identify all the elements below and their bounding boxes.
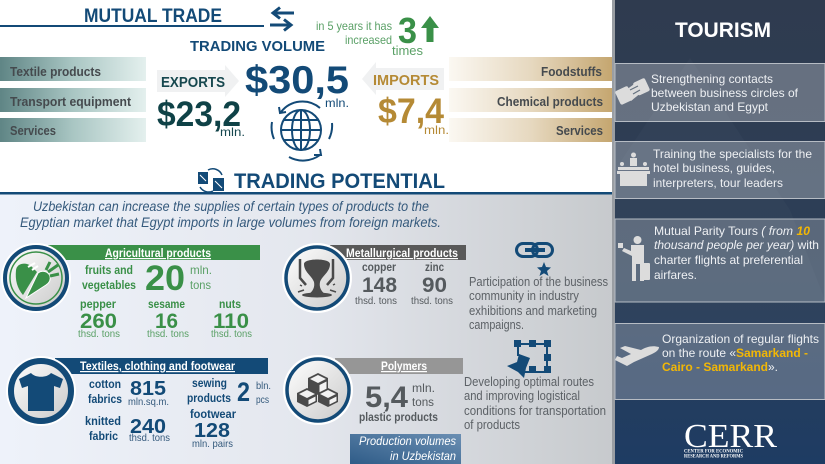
- exports arrow and value: $23,2: [157, 95, 241, 134]
- tourism item: regular flights: [615, 324, 825, 400]
- growth callout: times: [392, 44, 423, 58]
- tourism item: training: hotel business, guides,: [653, 161, 775, 175]
- intro text: [20, 198, 441, 230]
- panel: export products: [0, 57, 146, 142]
- heading: trading potential: TRADING POTENTIAL: [234, 170, 445, 193]
- growth callout: in 5 years it has: [316, 19, 392, 33]
- icon: handshake: [615, 78, 650, 105]
- icon: cubes: [283, 355, 353, 425]
- heading: trading volume: TRADING VOLUME: [190, 38, 325, 55]
- stat: fruits and vegetables: vegetables: [82, 278, 136, 292]
- icon: trading potential exchange: [198, 169, 224, 192]
- stat: pepper: thsd. tons: [78, 328, 120, 340]
- stat: sewing products: products: [187, 391, 231, 405]
- intro text: Uzbekistan can increase the supplies of certain types of products to the: [33, 198, 429, 214]
- tourism item: business contacts: [615, 64, 825, 122]
- stat: fruits and vegetables: 20: [145, 259, 185, 298]
- stat: zinc: zinc: [425, 260, 444, 274]
- stat: sesame: thsd. tons: [147, 328, 189, 340]
- stat: footwear: mln. pairs: [192, 438, 233, 450]
- tourism item: business contacts: Uzbekistan and Egypt: [651, 100, 769, 114]
- stat: sewing products: [187, 376, 271, 407]
- panel: polymers: [283, 355, 463, 425]
- panel: metallurgical products: [282, 243, 466, 313]
- icon: traveller with suitcase: [618, 236, 650, 281]
- stat: fruits and vegetables: fruits and: [85, 263, 133, 277]
- intro text: Egyptian market that Egypt imports in large volumes from foreign markets.: [20, 214, 441, 230]
- logo: CERR: CERR: [684, 418, 777, 455]
- text: optimal routes: conditions for transportation: [464, 404, 606, 418]
- stat: zinc: 90: [422, 274, 447, 297]
- tourism item: parity tours: charter flights at preferential: [654, 253, 803, 267]
- stat: sewing products: sewing: [192, 376, 227, 390]
- tourism item: regular flights: on the route «Samarkand -: [662, 346, 808, 360]
- icon: speaker at podium: [617, 152, 650, 186]
- text: optimal routes: of products: [464, 418, 520, 432]
- header bar: agricultural products: [48, 245, 260, 260]
- stat: knitted fabric: fabric: [89, 429, 118, 443]
- stat: knitted fabric: 240: [130, 416, 166, 438]
- imports arrow and value: $7,4: [378, 92, 445, 131]
- text: participation: community in industry: [469, 289, 580, 303]
- stat: footwear: 128: [194, 420, 230, 442]
- panel: export products: Transport equipment: [10, 94, 132, 109]
- logo: CERR: CENTER FOR ECONOMIC: [684, 450, 743, 454]
- text: optimal routes: [464, 375, 606, 432]
- exports arrow and value: mln.: [220, 125, 245, 139]
- stat: sesame: [147, 297, 189, 340]
- stat: knitted fabric: thsd. tons: [129, 432, 170, 444]
- tourism item: parity tours: Mutual Parity Tours ( from 10: [654, 224, 810, 238]
- panel: import products: Foodstuffs: [541, 64, 602, 79]
- stat: pepper: 260: [80, 310, 117, 333]
- total trade value: mln.: [325, 96, 349, 110]
- growth callout: [316, 10, 439, 58]
- icon: t-shirt: [6, 356, 76, 426]
- stat: footwear: footwear: [190, 407, 236, 421]
- stat: knitted fabric: knitted: [85, 414, 121, 428]
- panel: textiles, clothing and footwear: [6, 356, 271, 450]
- stat: sewing products: bln.: [256, 380, 271, 392]
- text: participation: exhibitions and marketing: [469, 304, 597, 318]
- stat: pepper: pepper: [80, 297, 116, 311]
- icon: fruit and carrot: [1, 243, 71, 313]
- header bar: polymers: Polymers: [381, 359, 427, 373]
- stat: cotton fabrics: 815: [130, 378, 166, 400]
- panel: export products: Services: [10, 123, 56, 138]
- stat: fruits and vegetables: tons: [190, 278, 211, 292]
- tourism item: training: interpreters, tour leaders: [653, 176, 783, 190]
- panel: import products: [449, 57, 614, 142]
- imports arrow and value: [362, 62, 449, 137]
- icon: airplane: [615, 346, 659, 366]
- stat: plastic products: [359, 381, 438, 424]
- stat: knitted fabric: [85, 414, 170, 444]
- stat: footwear: [190, 407, 236, 450]
- stat: pepper: [78, 297, 120, 340]
- exports arrow and value: [157, 65, 245, 139]
- stat: cotton fabrics: mln.sq.m.: [128, 396, 169, 408]
- icon: route with navigation arrow: [507, 340, 551, 378]
- text: participation: [469, 275, 608, 332]
- stat: nuts: thsd. tons: [211, 328, 252, 340]
- panel: tourism sidebar: [612, 0, 825, 464]
- stat: sewing products: 2: [237, 377, 250, 407]
- stat: nuts: nuts: [219, 297, 241, 311]
- stat: sesame: sesame: [148, 297, 185, 311]
- tourism item: parity tours: thousand people per year) with: [654, 238, 819, 252]
- tourism item: training: Training the specialists for the: [653, 147, 812, 161]
- icon: molten metal ladle: [282, 243, 352, 313]
- panel: import products: Chemical products: [497, 94, 603, 109]
- tourism item: business contacts: between business circles of: [651, 86, 799, 100]
- growth callout: increased: [345, 33, 392, 47]
- note: production volumes: [350, 434, 461, 464]
- tourism item: business contacts: Strengthening contacts: [651, 72, 773, 86]
- stat: plastic products: mln.: [412, 381, 435, 395]
- stat: plastic products: plastic products: [359, 410, 438, 424]
- tourism item: training: [615, 142, 825, 198]
- panel: import products: Services: [556, 123, 603, 138]
- stat: copper: copper: [362, 260, 396, 274]
- stat: zinc: [411, 260, 453, 307]
- text: optimal routes: and improving logistical: [464, 389, 580, 403]
- tourism item: parity tours: airfares.: [654, 268, 697, 282]
- stat: copper: thsd. tons: [355, 295, 397, 307]
- header bar: polymers: [335, 358, 463, 374]
- header bar: textiles: Textiles, clothing and footwear: [80, 359, 235, 373]
- header bar: agricultural products: Agricultural products: [105, 246, 211, 260]
- stat: sesame: 16: [155, 310, 178, 333]
- stat: nuts: [211, 297, 252, 340]
- stat: zinc: thsd. tons: [411, 295, 453, 307]
- stat: sewing products: pcs: [256, 394, 269, 406]
- icon: globe with circular arrows: [272, 101, 332, 161]
- note: production volumes: in Uzbekistan: [390, 449, 456, 463]
- stat: plastic products: 5,4: [365, 381, 408, 414]
- stat: cotton fabrics: cotton: [89, 377, 121, 391]
- note: production volumes: Production volumes: [359, 434, 456, 448]
- stat: cotton fabrics: [88, 377, 169, 408]
- panel: agricultural products: [1, 243, 260, 340]
- stat: fruits and vegetables: mln.: [190, 263, 212, 277]
- tourism item: parity tours: [615, 219, 825, 302]
- icon: chain link and star: [516, 244, 552, 276]
- exports arrow and value: EXPORTS: [161, 74, 225, 91]
- heading: tourism: TOURISM: [675, 19, 771, 42]
- imports arrow and value: IMPORTS: [373, 72, 439, 89]
- stat: nuts: 110: [213, 310, 249, 333]
- tourism item: regular flights: Cairo - Samarkand».: [662, 360, 778, 374]
- text: optimal routes: Developing optimal routes: [464, 375, 594, 389]
- panel: export products: Textile products: [10, 64, 101, 79]
- stat: cotton fabrics: fabrics: [88, 392, 122, 406]
- stat: copper: 148: [362, 274, 397, 297]
- stat: copper: [355, 260, 397, 307]
- logo: CERR: RESEARCH AND REFORMS: [684, 454, 743, 460]
- icon: exchange arrows: [270, 8, 294, 30]
- stat: plastic products: tons: [412, 395, 434, 409]
- imports arrow and value: mln.: [424, 123, 449, 137]
- total trade value: $30,5: [245, 59, 349, 102]
- heading: mutual trade: MUTUAL TRADE: [84, 6, 222, 27]
- text: participation: Participation of the business: [469, 275, 608, 289]
- header bar: metallurgical: Metallurgical products: [346, 246, 458, 260]
- stat: fruits and vegetables: [82, 259, 212, 298]
- tourism item: regular flights: Organization of regular flights: [662, 332, 819, 346]
- text: participation: campaigns.: [469, 318, 524, 332]
- growth callout: 3: [398, 10, 417, 51]
